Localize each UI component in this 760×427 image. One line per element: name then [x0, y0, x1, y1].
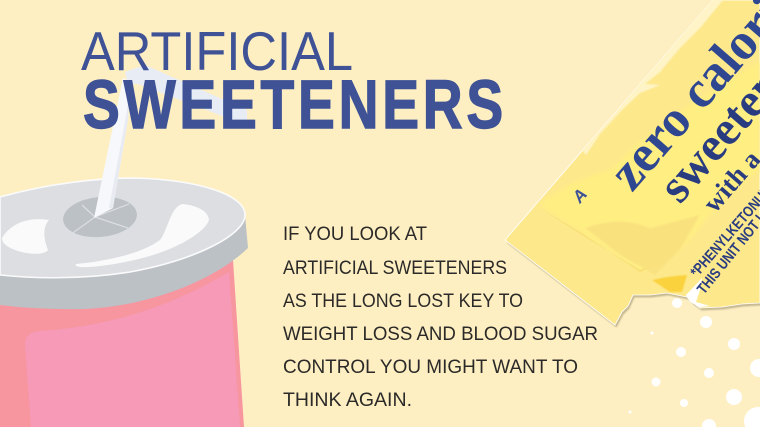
straw lower shade — [109, 90, 130, 208]
straw upper segment — [125, 65, 247, 122]
sugar dots — [628, 298, 760, 427]
lid straw slits — [70, 204, 129, 235]
title: sweeteners: SWEETENERS — [83, 66, 507, 143]
cup body — [0, 260, 244, 427]
packet orange crease — [652, 275, 687, 292]
packet bright band — [538, 60, 760, 270]
packet base — [505, 0, 760, 325]
packet crease — [540, 208, 662, 272]
body text: IF YOU LOOK AT — [283, 223, 427, 245]
body text — [283, 223, 598, 411]
cup drink highlight — [25, 272, 240, 427]
body text: AS THE LONG LOST KEY TO — [283, 290, 523, 312]
icon: straw — [94, 65, 247, 218]
icon: soda cup — [0, 65, 248, 427]
packet tear — [686, 278, 710, 307]
lid rim — [0, 215, 248, 309]
lid left highlight — [2, 219, 49, 254]
title: artificial: ARTIFICIAL — [81, 20, 353, 82]
lid center recess — [61, 194, 139, 240]
packet shadow — [506, 242, 760, 328]
icon: torn sweetener packet — [505, 0, 760, 325]
packet torn highlight — [583, 0, 723, 155]
lid right highlight — [76, 204, 209, 267]
lid top — [0, 178, 245, 278]
packet letter a: A — [568, 185, 591, 207]
body text: ARTIFICIAL SWEETENERS — [283, 257, 507, 279]
body text: WEIGHT LOSS AND BLOOD SUGAR — [283, 323, 598, 345]
straw lower segment — [94, 78, 131, 218]
body text: THINK AGAIN. — [283, 389, 412, 411]
packet mottled shading — [585, 215, 700, 275]
body text: CONTROL YOU MIGHT WANT TO — [283, 356, 578, 378]
